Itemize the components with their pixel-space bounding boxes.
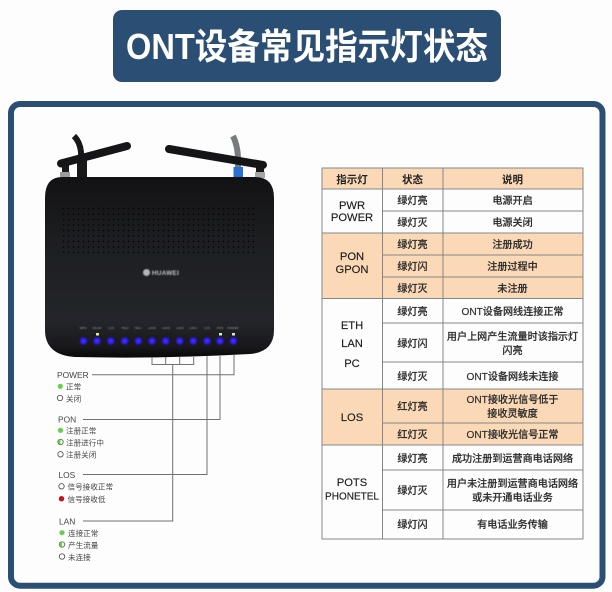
- row group: ETH: ONT设备网线未连接: [467, 370, 558, 383]
- indicator labels: TEL1: [134, 326, 142, 330]
- row group: PON: 注册过程中: [487, 260, 538, 273]
- row group: PON: [336, 238, 538, 295]
- brand logo: [143, 269, 179, 277]
- legend: LOS: LOS: [58, 470, 76, 480]
- brand logo: HUAWEI: [152, 270, 179, 277]
- left antenna and cable: [60, 136, 127, 178]
- legend: PON: 注册进行中: [66, 438, 104, 448]
- row group: PWR: [331, 194, 533, 229]
- legend: PON: 注册关闭: [66, 450, 96, 460]
- indicator labels: LAN3: [162, 326, 170, 330]
- table header: 状态: [402, 173, 423, 186]
- connector lines: [83, 355, 234, 521]
- router body: [45, 177, 274, 358]
- row group: PON: 未注册: [497, 282, 528, 295]
- title: ONT设备常见指示灯状态: [126, 26, 488, 67]
- indicator labels: LAN1: [189, 326, 197, 330]
- row group: LOS: [341, 393, 558, 441]
- row group: LOS: 红灯灭: [397, 428, 428, 441]
- row group: ETH: 绿灯亮: [397, 305, 428, 318]
- row group: PON: GPON: [336, 264, 368, 276]
- row group: POTS: [325, 452, 578, 531]
- table grid: [322, 168, 583, 539]
- row group: ETH: LAN: [341, 338, 363, 350]
- row group: ETH: 绿灯灭: [397, 370, 428, 383]
- row group: ETH: 用户上网产生流量时该指示灯: [447, 330, 578, 343]
- row group: PON: PON: [340, 251, 364, 263]
- legend: PON: 注册正常: [66, 426, 96, 436]
- row group: PON: 绿灯亮: [397, 238, 428, 251]
- row group: POTS: POTS: [337, 477, 367, 489]
- legend: LOS: 信号接收低: [68, 494, 106, 504]
- row group: PON: 绿灯灭: [397, 282, 428, 295]
- legend: POWER: 正常: [66, 382, 81, 392]
- legend: LAN: [59, 516, 99, 562]
- indicator labels: WLAN: [93, 326, 101, 330]
- legend: LOS: 信号接收正常: [68, 482, 113, 492]
- small status lights: [96, 333, 235, 336]
- legend: POWER: [57, 370, 89, 404]
- indicator labels: LOS: [204, 326, 210, 330]
- row group: PWR: PWR: [339, 200, 365, 212]
- legend: PON: [58, 414, 104, 460]
- row group: POTS: PHONETEL: [325, 492, 379, 502]
- row group: LOS: 接收灵敏度: [487, 407, 538, 420]
- row group: LOS: LOS: [341, 412, 363, 424]
- title: [113, 10, 501, 82]
- vent holes: [62, 207, 257, 253]
- row group: PON: 注册成功: [492, 238, 533, 251]
- table header: 说明: [502, 173, 523, 186]
- table shading: [322, 168, 583, 445]
- row group: ETH: PC: [344, 358, 360, 370]
- row group: POTS: 成功注册到运营商电话网络: [452, 452, 573, 465]
- table header: [336, 173, 523, 186]
- legend: LAN: 连接正常: [68, 528, 98, 538]
- indicator labels: TEL2: [121, 326, 129, 330]
- row group: ETH: ONT设备网线连接正常: [461, 305, 564, 318]
- legend: PON: PON: [58, 414, 76, 424]
- legend: LOS: [58, 470, 113, 504]
- router illustration: [45, 136, 274, 358]
- table header: 指示灯: [336, 173, 368, 186]
- legend: POWER: 关闭: [66, 394, 81, 404]
- row group: POTS: 绿灯闪: [397, 518, 428, 531]
- indicator labels: LAN4: [148, 326, 156, 330]
- row group: LOS: 红灯亮: [397, 400, 428, 413]
- row group: ETH: [341, 305, 578, 383]
- indicator labels: PON: [217, 326, 223, 330]
- row group: POTS: 或未开通电话业务: [472, 491, 553, 504]
- row group: ETH: 闪亮: [502, 344, 523, 357]
- row group: ETH: 绿灯闪: [397, 337, 428, 350]
- row group: POTS: 有电话业务传输: [477, 518, 548, 531]
- row group: PWR: POWER: [331, 212, 373, 224]
- legend: LAN: 未连接: [68, 552, 91, 562]
- indicator labels: [80, 326, 239, 330]
- row group: LOS: ONT接收光信号低于: [467, 393, 558, 406]
- blue LEDs: [78, 336, 238, 346]
- legend: POWER: POWER: [57, 370, 89, 380]
- indicator labels: LOS: [108, 326, 114, 330]
- indicator labels: LAN2: [176, 326, 184, 330]
- row group: PON: 绿灯闪: [397, 260, 428, 273]
- row group: PWR: 电源开启: [492, 194, 533, 207]
- row group: PWR: 电源关闭: [492, 216, 533, 229]
- indicator labels: POWER: [227, 326, 239, 330]
- row group: POTS: 绿灯亮: [397, 452, 428, 465]
- legend: LAN: 产生流量: [68, 540, 99, 550]
- legend: LAN: LAN: [59, 516, 75, 526]
- row group: ETH: ETH: [341, 320, 363, 332]
- row group: PWR: 绿灯亮: [397, 194, 428, 207]
- indicator labels: WPS: [80, 326, 86, 330]
- right antenna and cable: [169, 136, 265, 178]
- row group: LOS: ONT接收光信号正常: [467, 428, 558, 441]
- row group: PWR: 绿灯灭: [397, 216, 428, 229]
- row group: POTS: 用户未注册到运营商电话网络: [447, 477, 578, 490]
- status table: [322, 168, 583, 539]
- panel: main frame: [11, 104, 602, 586]
- row group: POTS: 绿灯灭: [397, 484, 428, 497]
